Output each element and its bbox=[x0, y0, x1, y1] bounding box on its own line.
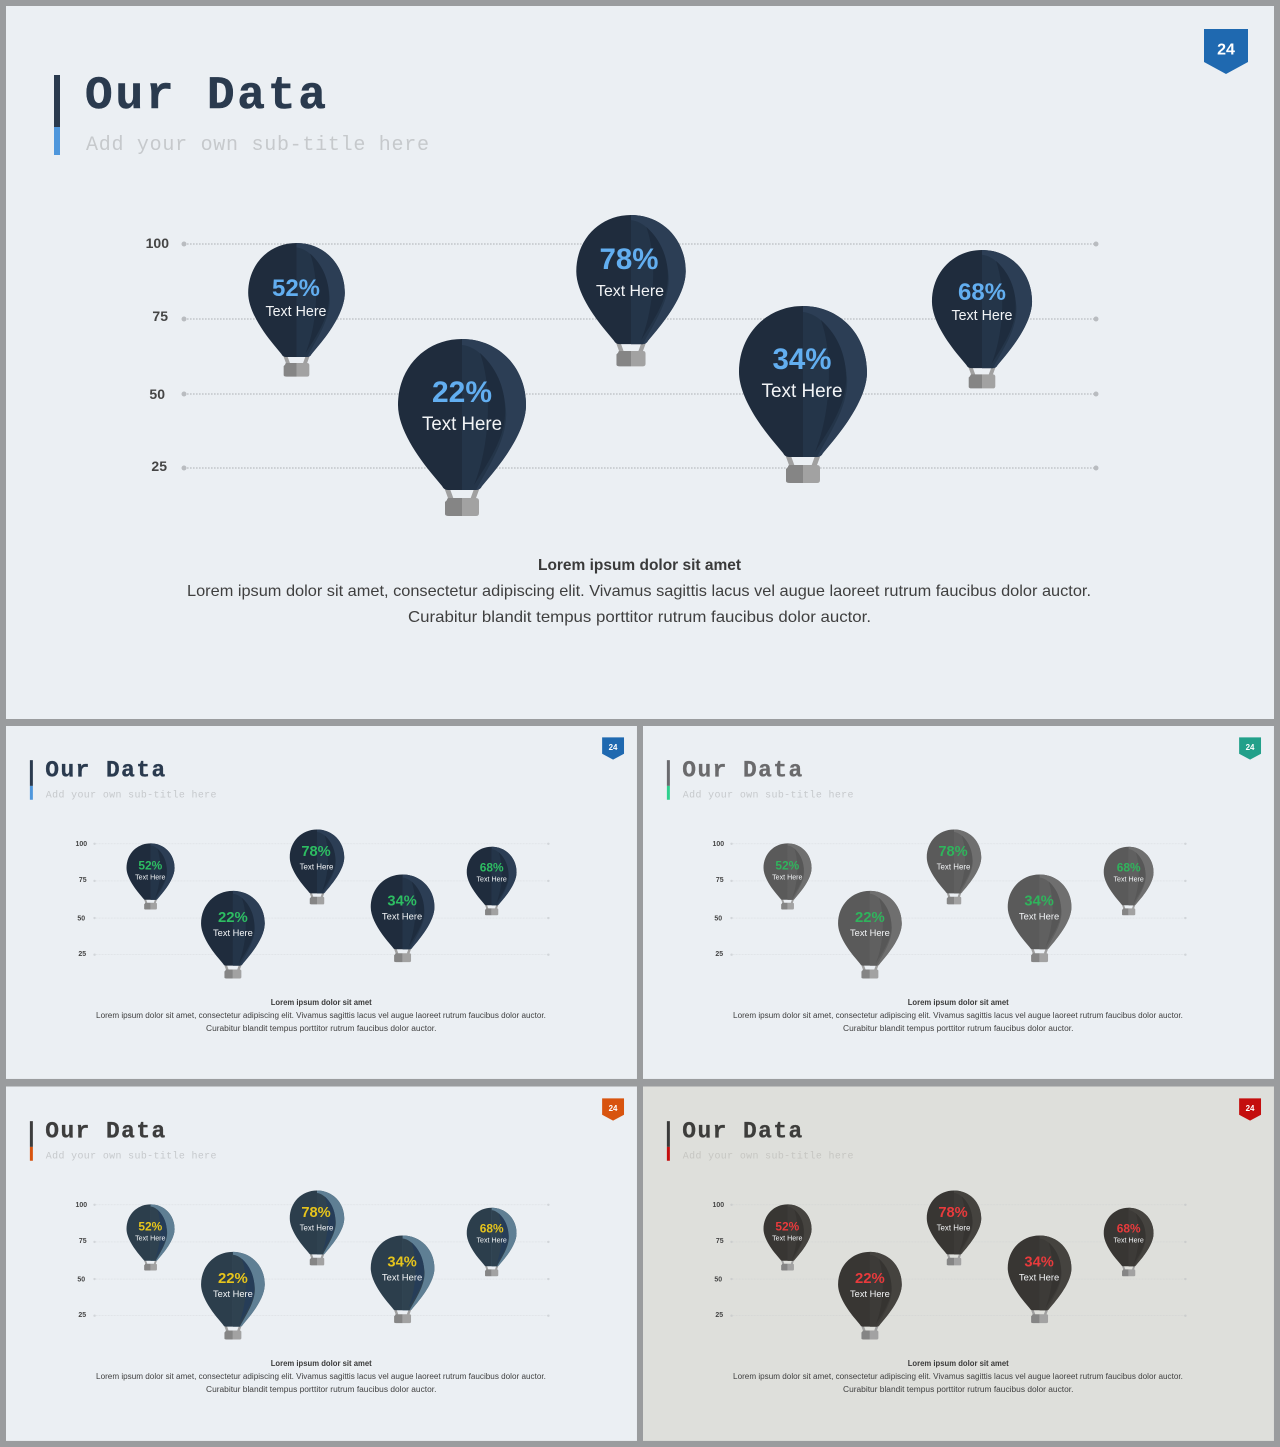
panel: variant slide warm grey with red bbox=[643, 1087, 1274, 1441]
chart axis and grid: 100 bbox=[713, 841, 724, 848]
balloon 34%: 34% bbox=[1024, 1255, 1054, 1271]
balloon 78% bbox=[576, 215, 686, 366]
balloon 78%: 78% bbox=[301, 844, 331, 860]
balloon 68%: Text Here bbox=[952, 308, 1012, 324]
description text: Lorem ipsum dolor sit amet, consectetur adipiscing elit. Vivamus sagittis lacus vel augue laoreet rutrum faucibus dolor auctor. bbox=[733, 1011, 1183, 1020]
heading: Our Data bbox=[682, 1119, 803, 1144]
balloon 52%: Text Here bbox=[772, 1233, 802, 1242]
balloon 78% bbox=[290, 829, 344, 904]
description text: Curabitur blandit tempus porttitor rutrum faucibus dolor auctor. bbox=[408, 609, 871, 626]
balloon 34% bbox=[371, 1236, 434, 1323]
balloon 52%: 52% bbox=[138, 1220, 163, 1234]
title accent bar bbox=[667, 1121, 670, 1161]
balloon 22%: Text Here bbox=[213, 927, 253, 938]
balloon 68% bbox=[467, 847, 517, 915]
balloon 34% bbox=[1008, 875, 1071, 962]
balloon 68% bbox=[1104, 1208, 1154, 1276]
balloon 68%: 68% bbox=[480, 861, 504, 875]
description text: Curabitur blandit tempus porttitor rutrum faucibus dolor auctor. bbox=[206, 1385, 436, 1394]
balloon 52% bbox=[764, 843, 812, 909]
balloon 34%: Text Here bbox=[1019, 1272, 1059, 1283]
balloon 22%: 22% bbox=[855, 1271, 885, 1287]
balloon 68%: Text Here bbox=[476, 874, 507, 883]
sub-title: Add your own sub-title here bbox=[683, 1150, 854, 1161]
title accent bar bbox=[30, 1121, 33, 1161]
panel: variant slide grey with teal bbox=[643, 726, 1274, 1079]
balloon 68%: Text Here bbox=[1113, 874, 1144, 883]
balloon 52%: 52% bbox=[775, 1220, 800, 1234]
description text: Lorem ipsum dolor sit amet, consectetur adipiscing elit. Vivamus sagittis lacus vel augue laoreet rutrum faucibus dolor auctor. bbox=[733, 1372, 1183, 1381]
balloon 68%: Text Here bbox=[476, 1235, 507, 1244]
balloon 22%: 22% bbox=[432, 376, 492, 409]
balloon 22% bbox=[201, 1252, 265, 1339]
balloon 52% bbox=[127, 843, 175, 909]
balloon 34%: Text Here bbox=[382, 911, 422, 922]
title accent bar bbox=[30, 760, 33, 800]
balloon 68%: 68% bbox=[1117, 1222, 1141, 1236]
balloon 22%: 22% bbox=[218, 910, 248, 926]
chart axis and grid: 100 bbox=[713, 1202, 724, 1209]
sub-title: Add your own sub-title here bbox=[683, 789, 854, 800]
description text: Lorem ipsum dolor sit amet bbox=[271, 998, 372, 1007]
balloon 34%: 34% bbox=[1024, 894, 1054, 910]
sub-title: Add your own sub-title here bbox=[86, 134, 429, 157]
heading: Our Data bbox=[85, 70, 326, 122]
page number badge bbox=[1239, 737, 1261, 760]
balloon 78%: 78% bbox=[938, 1205, 968, 1221]
chart axis and grid: 25 bbox=[78, 951, 86, 958]
balloon 52%: 52% bbox=[138, 859, 163, 873]
heading: Our Data bbox=[45, 758, 166, 783]
chart axis and grid: 75 bbox=[152, 308, 168, 324]
balloon 78%: Text Here bbox=[596, 283, 664, 300]
page number badge: 24 bbox=[1246, 743, 1255, 752]
description text: Curabitur blandit tempus porttitor rutrum faucibus dolor auctor. bbox=[206, 1024, 436, 1033]
balloon 68%: 68% bbox=[958, 279, 1006, 306]
balloon 68% bbox=[1104, 847, 1154, 915]
balloon 34%: Text Here bbox=[1019, 911, 1059, 922]
sub-title: Add your own sub-title here bbox=[46, 789, 217, 800]
balloon 78%: Text Here bbox=[300, 1224, 334, 1233]
chart axis and grid bbox=[713, 1202, 1187, 1319]
balloon 68%: 68% bbox=[1117, 861, 1141, 875]
chart axis and grid: 50 bbox=[149, 386, 165, 402]
balloon 68% bbox=[467, 1208, 517, 1276]
chart axis and grid: 25 bbox=[715, 1312, 723, 1319]
title accent bar bbox=[54, 75, 60, 155]
balloon 22% bbox=[398, 339, 526, 516]
balloon 78% bbox=[927, 1190, 981, 1265]
balloon 52% bbox=[127, 1204, 175, 1270]
page number badge bbox=[1239, 1098, 1261, 1121]
heading: Our Data bbox=[682, 758, 803, 783]
chart axis and grid: 75 bbox=[716, 877, 724, 884]
chart axis and grid bbox=[76, 841, 550, 958]
description text: Curabitur blandit tempus porttitor rutrum faucibus dolor auctor. bbox=[843, 1385, 1073, 1394]
balloon 52% bbox=[764, 1204, 812, 1270]
chart axis and grid bbox=[146, 235, 1098, 474]
page number badge: 24 bbox=[609, 743, 618, 752]
balloon 78% bbox=[290, 1190, 344, 1265]
balloon 34% bbox=[1008, 1236, 1071, 1323]
description text: Lorem ipsum dolor sit amet bbox=[908, 1359, 1009, 1368]
description text bbox=[187, 557, 1091, 626]
description text: Lorem ipsum dolor sit amet bbox=[538, 557, 742, 574]
balloon 68%: 68% bbox=[480, 1222, 504, 1236]
balloon 34%: 34% bbox=[387, 894, 417, 910]
description text bbox=[733, 998, 1183, 1033]
page number badge: 24 bbox=[609, 1104, 618, 1113]
balloon 22%: Text Here bbox=[850, 1288, 890, 1299]
chart axis and grid: 50 bbox=[714, 1277, 722, 1284]
description text: Lorem ipsum dolor sit amet bbox=[271, 1359, 372, 1368]
balloon 22%: 22% bbox=[218, 1271, 248, 1287]
heading: Our Data bbox=[45, 1119, 166, 1144]
chart axis and grid: 100 bbox=[146, 235, 169, 251]
chart axis and grid: 75 bbox=[716, 1238, 724, 1245]
title accent bar bbox=[667, 760, 670, 800]
description text: Lorem ipsum dolor sit amet bbox=[908, 998, 1009, 1007]
balloon 78%: 78% bbox=[600, 243, 658, 276]
page number badge bbox=[602, 1098, 624, 1121]
chart axis and grid: 25 bbox=[151, 458, 167, 474]
balloon 78%: 78% bbox=[938, 844, 968, 860]
balloon 22% bbox=[838, 1252, 902, 1339]
balloon 52%: 52% bbox=[775, 859, 800, 873]
description text: Lorem ipsum dolor sit amet, consectetur adipiscing elit. Vivamus sagittis lacus vel augue laoreet rutrum faucibus dolor auctor. bbox=[96, 1011, 546, 1020]
chart axis and grid: 50 bbox=[77, 916, 85, 923]
balloon 22% bbox=[201, 891, 265, 978]
balloon 78% bbox=[927, 829, 981, 904]
balloon 34% bbox=[739, 306, 867, 483]
description text: Lorem ipsum dolor sit amet, consectetur adipiscing elit. Vivamus sagittis lacus vel augue laoreet rutrum faucibus dolor auctor. bbox=[187, 583, 1091, 600]
description text bbox=[96, 1359, 546, 1394]
balloon 52%: Text Here bbox=[772, 872, 802, 881]
page number badge bbox=[1204, 29, 1248, 74]
chart axis and grid bbox=[713, 841, 1187, 958]
description text bbox=[733, 1359, 1183, 1394]
balloon 68%: Text Here bbox=[1113, 1235, 1144, 1244]
balloon 22%: Text Here bbox=[213, 1288, 253, 1299]
chart axis and grid: 25 bbox=[78, 1312, 86, 1319]
balloon 22%: Text Here bbox=[850, 927, 890, 938]
page number badge bbox=[602, 737, 624, 760]
chart axis and grid: 25 bbox=[715, 951, 723, 958]
chart axis and grid bbox=[76, 1202, 550, 1319]
balloon 52%: Text Here bbox=[135, 1233, 165, 1242]
balloon 34%: 34% bbox=[387, 1255, 417, 1271]
chart axis and grid: 75 bbox=[79, 1238, 87, 1245]
balloon 34% bbox=[371, 875, 434, 962]
balloon 68% bbox=[932, 250, 1032, 388]
panel: variant slide slate with orange bbox=[6, 1087, 637, 1441]
chart axis and grid: 50 bbox=[714, 916, 722, 923]
balloon 78%: Text Here bbox=[300, 863, 334, 872]
panel: main slide bbox=[6, 6, 1274, 719]
chart axis and grid: 75 bbox=[79, 877, 87, 884]
balloon 34%: Text Here bbox=[382, 1272, 422, 1283]
sub-title: Add your own sub-title here bbox=[46, 1150, 217, 1161]
balloon 78%: Text Here bbox=[937, 863, 971, 872]
balloon 34%: 34% bbox=[772, 343, 832, 376]
balloon 34%: Text Here bbox=[762, 381, 842, 402]
balloon 78%: Text Here bbox=[937, 1224, 971, 1233]
balloon 52%: 52% bbox=[272, 275, 320, 302]
balloon 22%: 22% bbox=[855, 910, 885, 926]
page number badge: 24 bbox=[1217, 42, 1235, 58]
page number badge: 24 bbox=[1246, 1104, 1255, 1113]
description text: Curabitur blandit tempus porttitor rutrum faucibus dolor auctor. bbox=[843, 1024, 1073, 1033]
description text: Lorem ipsum dolor sit amet, consectetur adipiscing elit. Vivamus sagittis lacus vel augue laoreet rutrum faucibus dolor auctor. bbox=[96, 1372, 546, 1381]
balloon 22% bbox=[838, 891, 902, 978]
balloon 52%: Text Here bbox=[266, 304, 326, 320]
balloon 52% bbox=[248, 243, 345, 377]
balloon 22%: Text Here bbox=[422, 414, 502, 435]
balloon 52%: Text Here bbox=[135, 872, 165, 881]
chart axis and grid: 100 bbox=[76, 841, 87, 848]
balloon 78%: 78% bbox=[301, 1205, 331, 1221]
chart axis and grid: 100 bbox=[76, 1202, 87, 1209]
chart axis and grid: 50 bbox=[77, 1277, 85, 1284]
description text bbox=[96, 998, 546, 1033]
panel: variant slide green on navy bbox=[6, 726, 637, 1079]
